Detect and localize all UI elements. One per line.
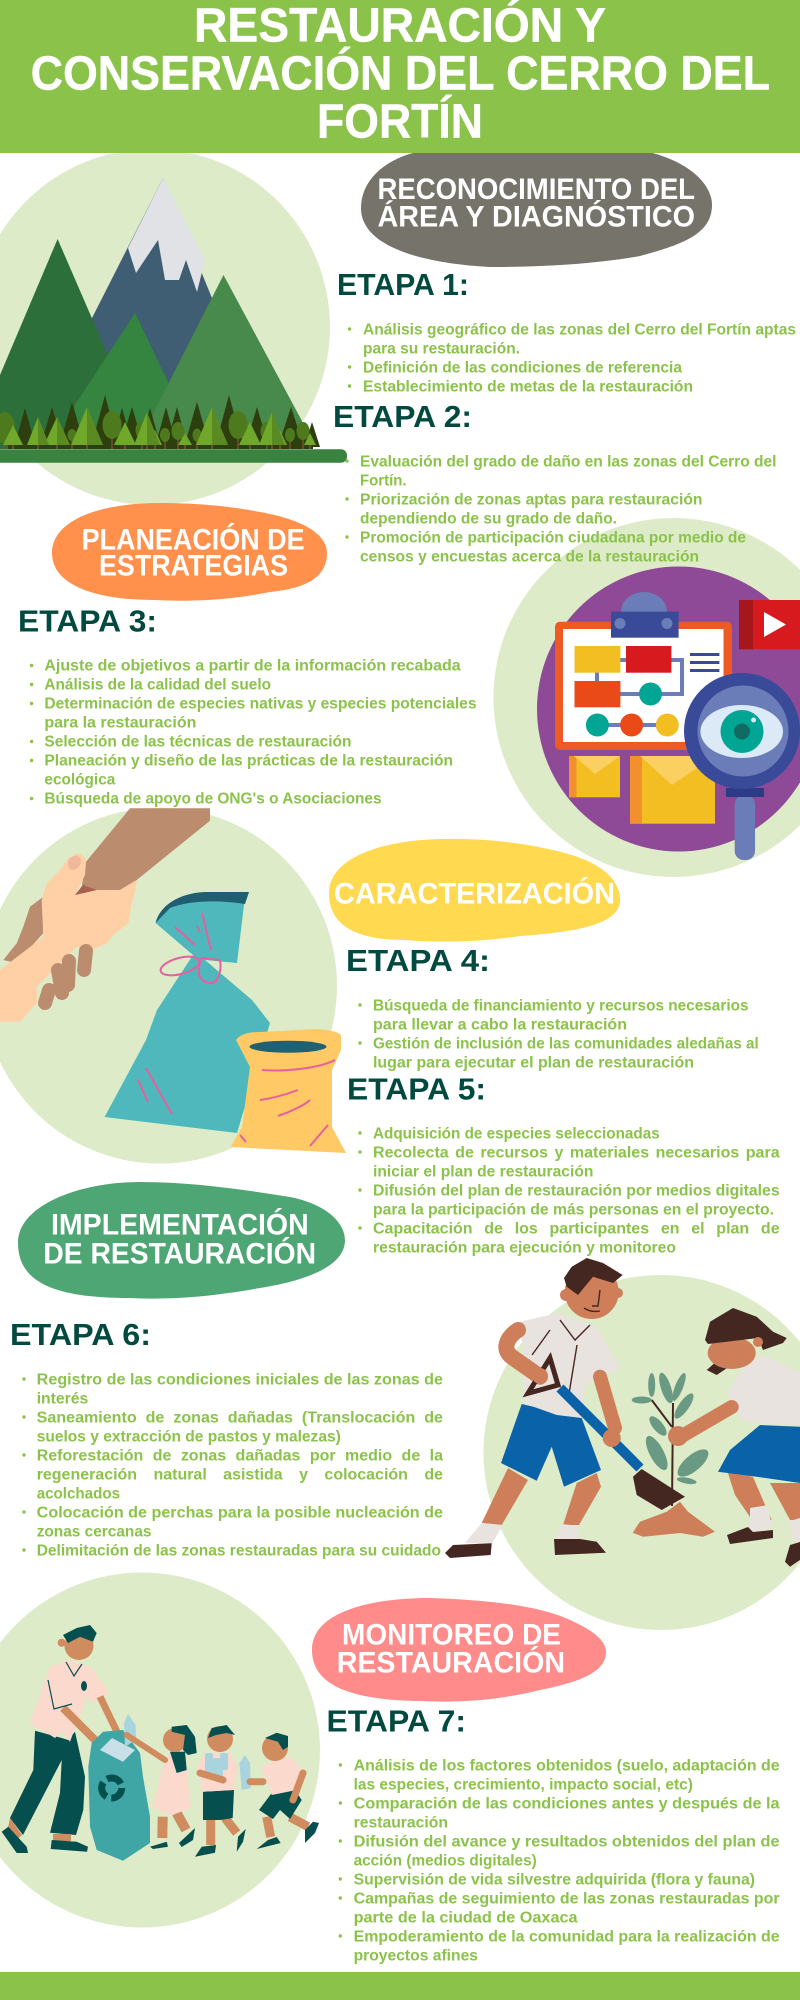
header band <box>0 0 800 153</box>
icon: envelopes <box>569 756 715 824</box>
heading: implementación de restauración: DE RESTAURACIÓN <box>43 1236 316 1270</box>
list: etapa 5: Adquisición de especies seleccionadas <box>373 1125 660 1142</box>
list: etapa 1: Análisis geográfico de las zonas del Cerro del Fortín aptas <box>363 321 796 338</box>
icon: clipboard with flowchart <box>555 592 732 750</box>
list: etapa 6: regeneración natural asistida y colocación de <box>37 1466 443 1483</box>
list: etapa 6: interés <box>37 1390 88 1407</box>
list: etapa 5: Recolecta de recursos y materiales necesarios para <box>373 1144 780 1161</box>
list: etapa 3: ecológica <box>44 771 115 788</box>
list: etapa 7: proyectos afines <box>354 1947 478 1964</box>
title: FORTÍN <box>317 94 483 148</box>
list: etapa 2: Promoción de participación ciudadana por medio de <box>360 529 746 546</box>
icon: man <box>2 1625 120 1853</box>
list: etapa 3: Búsqueda de apoyo de ONG's o Asociaciones <box>44 790 382 807</box>
list: etapa 2: dependiendo de su grado de daño. <box>360 510 617 527</box>
icon: teal bag <box>105 892 270 1133</box>
list: etapa 7: Comparación de las condiciones antes y después de la <box>354 1795 780 1812</box>
panel: mountain illustration <box>0 149 347 505</box>
list: etapa 6: Reforestación de zonas dañadas por medio de la <box>37 1447 443 1464</box>
heading: implementación de restauración: IMPLEMENTACIÓN <box>51 1207 309 1241</box>
list: etapa 5: restauración para ejecución y monitoreo <box>373 1239 676 1256</box>
panel: right circle strategy illustration <box>494 518 800 877</box>
heading: planeación de estrategias: ESTRATEGIAS <box>99 550 288 583</box>
blob: planeación <box>52 503 327 601</box>
list: etapa 7: restauración <box>354 1814 448 1831</box>
list: etapa 7: Análisis de los factores obtenidos (suelo, adaptación de <box>354 1757 780 1774</box>
heading: reconocimiento del área y diagnóstico <box>378 173 695 234</box>
icon: hand <box>0 853 137 1022</box>
list: etapa 7: Empoderamiento de la comunidad para la realización de <box>354 1928 780 1945</box>
list: etapa 7: Supervisión de vida silvestre adquirida (flora y fauna) <box>354 1871 755 1888</box>
footer band <box>0 1972 800 2000</box>
list: etapa 4: lugar para ejecutar el plan de restauración <box>373 1054 694 1071</box>
list: etapa 2: Priorización de zonas aptas para restauración <box>360 491 702 508</box>
heading: etapa 4: ETAPA 4: <box>346 943 490 978</box>
list: etapa 3: Selección de las técnicas de restauración <box>44 733 352 750</box>
list: etapa 6: Delimitación de las zonas restauradas para su cuidado <box>37 1542 441 1559</box>
list: etapa 7: Difusión del avance y resultados obtenidos del plan de <box>354 1833 780 1850</box>
heading: etapa 2: ETAPA 2: <box>333 399 472 434</box>
list: etapa 4: para llevar a cabo la restauración <box>373 1016 627 1033</box>
heading: monitoreo de restauración: RESTAURACIÓN <box>337 1646 565 1680</box>
panel: planting illustration <box>445 1258 800 1630</box>
list: etapa 7: parte de la ciudad de Oaxaca <box>354 1909 578 1926</box>
blob: reconocimiento <box>361 150 712 267</box>
list: etapa 6: Colocación de perchas para la posible nucleación de <box>37 1504 443 1521</box>
list: etapa 2: censos y encuestas acerca de la restauración <box>360 548 699 565</box>
list: etapa 6: suelos y extracción de pastos y malezas) <box>37 1428 341 1445</box>
list: etapa 5 <box>358 1125 780 1256</box>
icon: boy with shovel <box>445 1258 685 1558</box>
title <box>31 0 770 148</box>
list: etapa 5: iniciar el plan de restauración <box>373 1163 593 1180</box>
heading: planeación de estrategias <box>82 522 305 583</box>
heading: etapa 3: ETAPA 3: <box>18 604 157 639</box>
list: etapa 3: Análisis de la calidad del suelo <box>44 676 271 693</box>
title: RESTAURACIÓN Y <box>194 0 606 53</box>
list: etapa 6 <box>22 1371 443 1559</box>
list: etapa 5: para la participación de más personas en el proyecto. <box>373 1201 774 1218</box>
heading: monitoreo de restauración: MONITOREO DE <box>342 1618 561 1651</box>
list: etapa 6: Saneamiento de zonas dañadas (Translocación de <box>37 1409 443 1426</box>
list: etapa 4 <box>358 997 759 1071</box>
list: etapa 3 <box>30 657 477 807</box>
list: etapa 1 <box>348 321 796 395</box>
list: etapa 2: Fortín. <box>360 472 407 489</box>
heading: etapa 6: ETAPA 6: <box>10 1317 151 1352</box>
list: etapa 6: acolchados <box>37 1485 120 1502</box>
icon: yellow sack <box>231 1029 346 1153</box>
list: etapa 4: Gestión de inclusión de las comunidades aledañas al <box>373 1035 759 1052</box>
list: etapa 7: Campañas de seguimiento de las zonas restauradas por <box>354 1890 780 1907</box>
heading: caracterización: CARACTERIZACIÓN <box>334 876 615 910</box>
heading: planeación de estrategias: PLANEACIÓN DE <box>82 522 305 556</box>
list: etapa 7: acción (medios digitales) <box>354 1852 537 1869</box>
list: etapa 3: Planeación y diseño de las prácticas de la restauración <box>44 752 453 769</box>
heading: etapa 1: ETAPA 1: <box>337 267 469 302</box>
icon: magnifying glass with eye <box>684 673 800 860</box>
list: etapa 3: para la restauración <box>44 714 196 731</box>
list: etapa 1: para su restauración. <box>363 340 520 357</box>
blob: monitoreo <box>312 1598 606 1702</box>
list: etapa 1: Definición de las condiciones de referencia <box>363 359 682 376</box>
icon: small boy <box>250 1733 319 1849</box>
heading: etapa 5: ETAPA 5: <box>347 1071 486 1106</box>
list: etapa 4: Búsqueda de financiamiento y recursos necesarios <box>373 997 749 1014</box>
icon: lower hand fingers <box>45 951 86 1003</box>
blob: caracterización <box>329 839 620 942</box>
icon: video play <box>739 600 800 649</box>
list: etapa 2 <box>345 453 776 565</box>
list: etapa 3: Determinación de especies nativas y especies potenciales <box>44 695 477 712</box>
heading: reconocimiento del área y diagnóstico: ÁREA Y DIAGNÓSTICO <box>378 200 695 234</box>
icon: recycling bag <box>88 1714 150 1861</box>
list: etapa 2: Evaluación del grado de daño en las zonas del Cerro del <box>360 453 776 470</box>
icon: sapling <box>632 1371 713 1506</box>
list: etapa 7: las especies, crecimiento, impacto social, etc) <box>354 1776 693 1793</box>
panel: recycling illustration <box>0 1572 320 1928</box>
heading: reconocimiento del área y diagnóstico: RECONOCIMIENTO DEL <box>378 173 695 206</box>
list: etapa 7 <box>339 1757 780 1964</box>
list: etapa 1: Establecimiento de metas de la restauración <box>363 378 693 395</box>
heading: implementación de restauración <box>43 1207 316 1270</box>
icon: arm <box>75 808 210 895</box>
list: etapa 6: zonas cercanas <box>37 1523 152 1540</box>
icon: forest <box>0 395 320 449</box>
icon: boy with bottles <box>195 1725 251 1857</box>
list: etapa 3: Ajuste de objetivos a partir de la información recabada <box>44 657 461 674</box>
blob: implementación <box>18 1182 345 1299</box>
list: etapa 6: Registro de las condiciones iniciales de las zonas de <box>37 1371 443 1388</box>
icon: girl with bottle <box>127 1725 197 1849</box>
list: etapa 5: Capacitación de los participantes en el plan de <box>373 1220 780 1237</box>
icon: soil mound <box>633 1502 715 1537</box>
heading: monitoreo de restauración <box>337 1618 565 1680</box>
icon: girl <box>668 1308 800 1567</box>
list: etapa 5: Difusión del plan de restauración por medios digitales <box>373 1182 780 1199</box>
icon: lower hand thumb <box>3 897 43 963</box>
title: CONSERVACIÓN DEL CERRO DEL <box>31 45 770 100</box>
panel: hands and bags illustration <box>0 808 346 1164</box>
heading: etapa 7: ETAPA 7: <box>326 1704 466 1739</box>
